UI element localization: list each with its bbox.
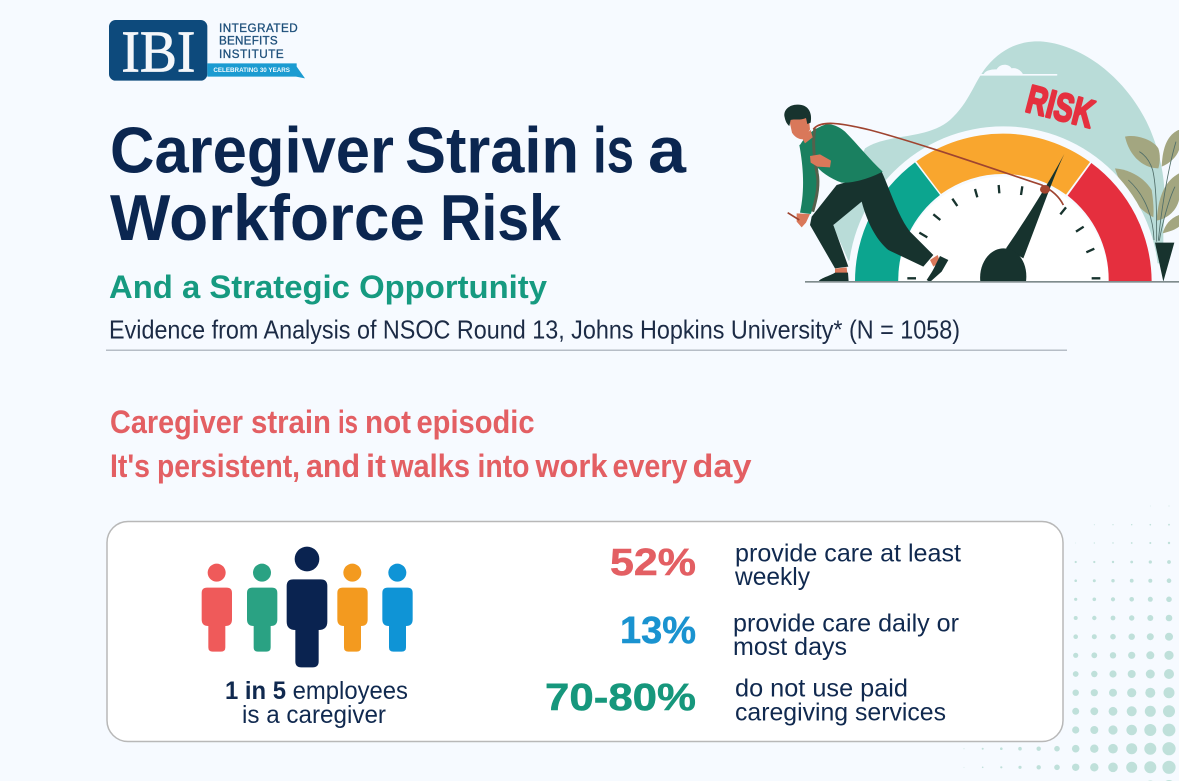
person: green [247, 564, 277, 652]
logo: Integrated Benefits Institute [109, 19, 305, 85]
title: Caregiver [110, 114, 394, 186]
stat: 13%: provide care daily or [733, 610, 959, 638]
plant [1115, 130, 1179, 242]
man [784, 105, 948, 282]
stat: 13%: most days [733, 633, 847, 661]
label: 1 in 5 employees: is a caregiver [242, 701, 386, 729]
line 1 [110, 404, 534, 440]
stat: 52%: 52% [610, 542, 696, 584]
logo name: INTEGRATED [219, 22, 298, 35]
hair [784, 105, 811, 126]
arm [799, 144, 819, 214]
rope [788, 123, 1063, 220]
line 2: it [366, 448, 386, 484]
trousers [810, 172, 933, 268]
person: blue [382, 564, 413, 652]
line 2: every [612, 448, 688, 484]
line 2: into [478, 448, 530, 484]
message heading [110, 404, 752, 484]
stat: 13% [620, 610, 959, 661]
line 2: walks [390, 448, 470, 484]
line 1: not [365, 404, 411, 440]
line 2 [110, 448, 752, 484]
torso [800, 124, 883, 183]
cloud [967, 65, 1057, 76]
stat: 70-80%: 70-80% [545, 677, 696, 719]
shoes [818, 256, 948, 282]
line 1: is [338, 404, 358, 440]
person: navy [287, 547, 327, 667]
risk label: RISK [1022, 77, 1099, 137]
rope knot [1040, 185, 1050, 194]
face [789, 115, 810, 139]
stat: 70-80%: caregiving services [735, 698, 946, 726]
icon: five people [202, 547, 413, 667]
plant pot [1155, 243, 1174, 282]
gauge ticks [907, 185, 1100, 278]
strap [813, 128, 818, 212]
ribbon text: CELEBRATING 30 YEARS [213, 67, 291, 74]
neck [802, 130, 813, 143]
stat: 52%: provide care at least [735, 540, 961, 568]
logo ribbon [207, 63, 305, 78]
line 2: work [535, 448, 608, 484]
gauge [848, 126, 1159, 282]
line 1: strain [251, 404, 331, 440]
line 1: episodic [416, 404, 534, 440]
logo name: INSTITUTE [219, 48, 284, 61]
logo name [219, 22, 298, 61]
line 2: persistent, [157, 448, 300, 484]
label: 1 in 5 employees: 1 in 5 employees [225, 677, 408, 705]
title [110, 114, 687, 254]
title: Risk [440, 181, 562, 254]
logo name: BENEFITS [219, 35, 278, 48]
stat: 52%: weekly [734, 563, 810, 591]
logo letters: IBI [121, 19, 195, 85]
stat: 52% [610, 540, 961, 591]
title: a [648, 114, 687, 186]
subtitle: And a Strategic Opportunity [109, 269, 547, 305]
title: Strain [405, 114, 579, 186]
line 2: and [306, 448, 360, 484]
title: Workforce [110, 181, 425, 254]
stat: 70-80% [545, 674, 946, 726]
hands and ankles [797, 154, 940, 274]
stat: 70-80%: do not use paid [735, 674, 908, 702]
evidence line: Evidence from Analysis of NSOC Round 13, Johns Hopkins University* (N = 1058) [109, 314, 960, 344]
line 1: Caregiver [110, 404, 243, 440]
person: orange [337, 564, 368, 652]
stat: 13%: 13% [620, 610, 696, 652]
logo box [109, 20, 207, 81]
ground line [805, 281, 1179, 283]
line 2: day [692, 448, 752, 484]
title: is [593, 114, 634, 186]
background blob [833, 41, 1165, 263]
person: red [202, 564, 232, 652]
label: 1 in 5 employees [225, 677, 408, 729]
panel: caregiver statistics [107, 522, 1063, 742]
line 2: It's [110, 448, 150, 484]
illustration: man pulling risk gauge [784, 41, 1179, 283]
gauge needle [980, 154, 1064, 282]
